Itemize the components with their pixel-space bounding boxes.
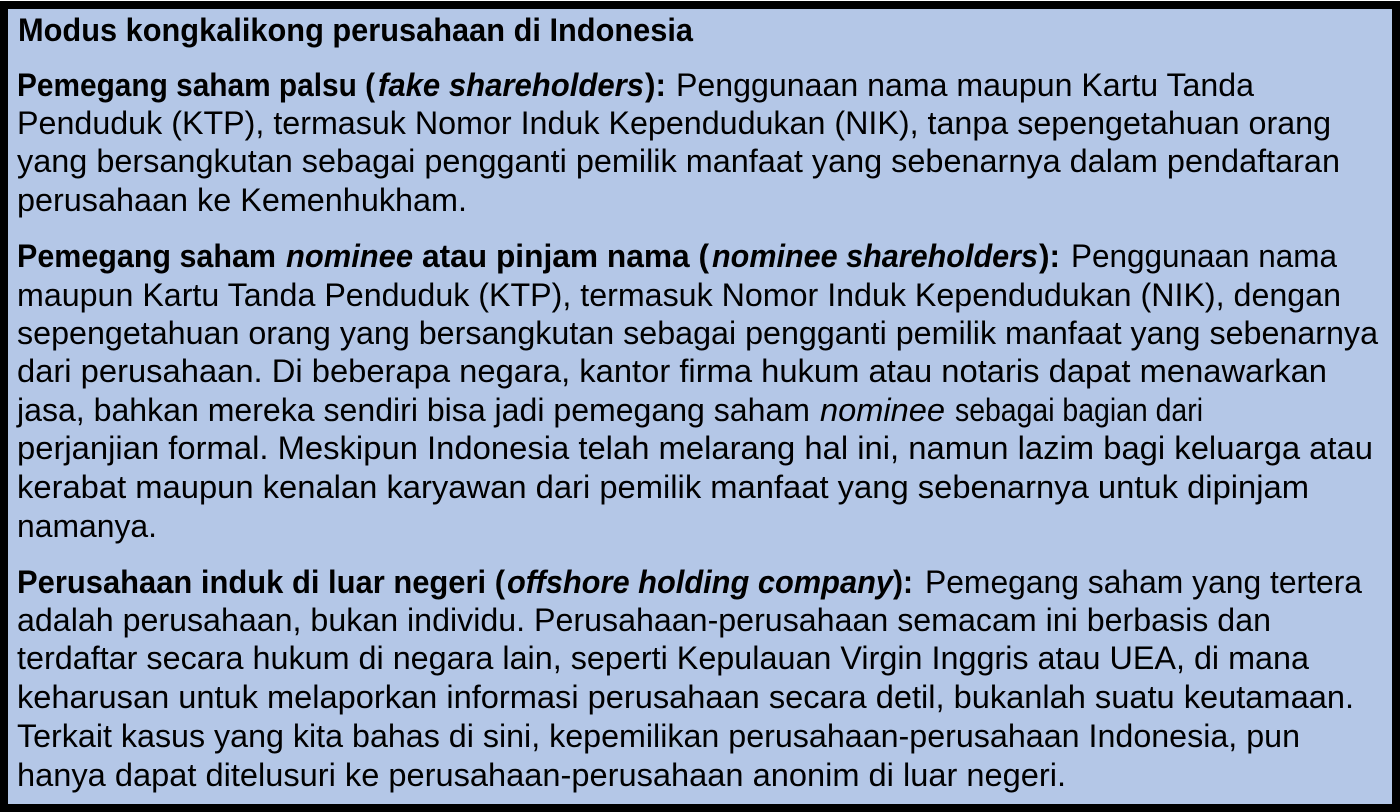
text block: fake shareholders: Pemegang saham palsu ( bbox=[17, 67, 375, 103]
text block: offshore holding company: hanya dapat ditelusuri ke perusahaan-perusahaan anonim di luar negeri. bbox=[17, 757, 1066, 793]
text block: offshore holding company: Pemegang saham yang tertera bbox=[925, 564, 1362, 600]
text block: fake shareholders: perusahaan ke Kemenhukham. bbox=[17, 182, 467, 218]
text block: fake shareholders bbox=[17, 67, 1340, 218]
text block: nominee shareholders: sebagai bagian dari bbox=[955, 392, 1203, 428]
text block: nominee shareholders: jasa, bahkan mereka sendiri bisa jadi pemegang saham bbox=[16, 392, 810, 428]
text block: offshore holding company: offshore holding company bbox=[507, 564, 895, 600]
text block: offshore holding company: adalah perusahaan, bukan individu. Perusahaan-perusahaan semacam ini berbasis dan bbox=[17, 602, 1271, 638]
text block: nominee shareholders: nominee bbox=[286, 238, 413, 274]
text block: nominee shareholders bbox=[16, 238, 1378, 544]
text block: fake shareholders: Penduduk (KTP), termasuk Nomor Induk Kependudukan (NIK), tanpa sepengetahuan orang bbox=[17, 105, 1331, 141]
text block: nominee shareholders: kerabat maupun kenalan karyawan dari pemilik manfaat yang sebenarnya untuk dipinjam bbox=[17, 469, 1309, 505]
text block: nominee shareholders: nominee bbox=[820, 392, 945, 428]
text block: offshore holding company: ): bbox=[893, 564, 913, 600]
text block: nominee shareholders: atau pinjam nama ( bbox=[422, 238, 709, 274]
text block: nominee shareholders: sepengetahuan orang yang bersangkutan sebagai pengganti pemilik manfaat yang sebenarnya bbox=[17, 315, 1378, 351]
text block: offshore holding company: keharusan untuk melaporkan informasi perusahaan secara detil, bukanlah suatu keutamaan. bbox=[17, 679, 1354, 715]
text block: offshore holding company bbox=[17, 564, 1362, 793]
text block: offshore holding company: Perusahaan induk di luar negeri ( bbox=[17, 564, 505, 600]
text block: fake shareholders: ): bbox=[645, 67, 666, 103]
text block: nominee shareholders: Penggunaan nama bbox=[1071, 238, 1337, 274]
text block: nominee shareholders: perjanjian formal. Meskipun Indonesia telah melarang hal ini, namun lazim bagi keluarga atau bbox=[17, 430, 1373, 466]
text block: fake shareholders: yang bersangkutan sebagai pengganti pemilik manfaat yang sebenarnya dalam pendaftaran bbox=[17, 143, 1340, 179]
title: Modus kongkalikong perusahaan di Indonesia bbox=[18, 12, 693, 48]
text block: nominee shareholders: dari perusahaan. Di beberapa negara, kantor firma hukum atau notaris dapat menawarkan bbox=[17, 353, 1327, 389]
text block: offshore holding company: Terkait kasus yang kita bahas di sini, kepemilikan perusahaan-perusahaan Indonesia, pun bbox=[17, 718, 1300, 754]
text block: nominee shareholders: maupun Kartu Tanda Penduduk (KTP), termasuk Nomor Induk Kependudukan (NIK), dengan bbox=[17, 277, 1341, 313]
text block: fake shareholders: Penggunaan nama maupun Kartu Tanda bbox=[676, 67, 1254, 103]
text block: nominee shareholders: namanya. bbox=[17, 508, 157, 544]
text block: nominee shareholders: nominee shareholders bbox=[712, 238, 1038, 274]
text block: offshore holding company: terdaftar secara hukum di negara lain, seperti Kepulauan Virgin Inggris atau UEA, di mana bbox=[17, 640, 1309, 676]
text block: nominee shareholders: ): bbox=[1039, 238, 1060, 274]
text block: fake shareholders: fake shareholders bbox=[378, 67, 644, 103]
text block: nominee shareholders: Pemegang saham bbox=[17, 238, 276, 274]
